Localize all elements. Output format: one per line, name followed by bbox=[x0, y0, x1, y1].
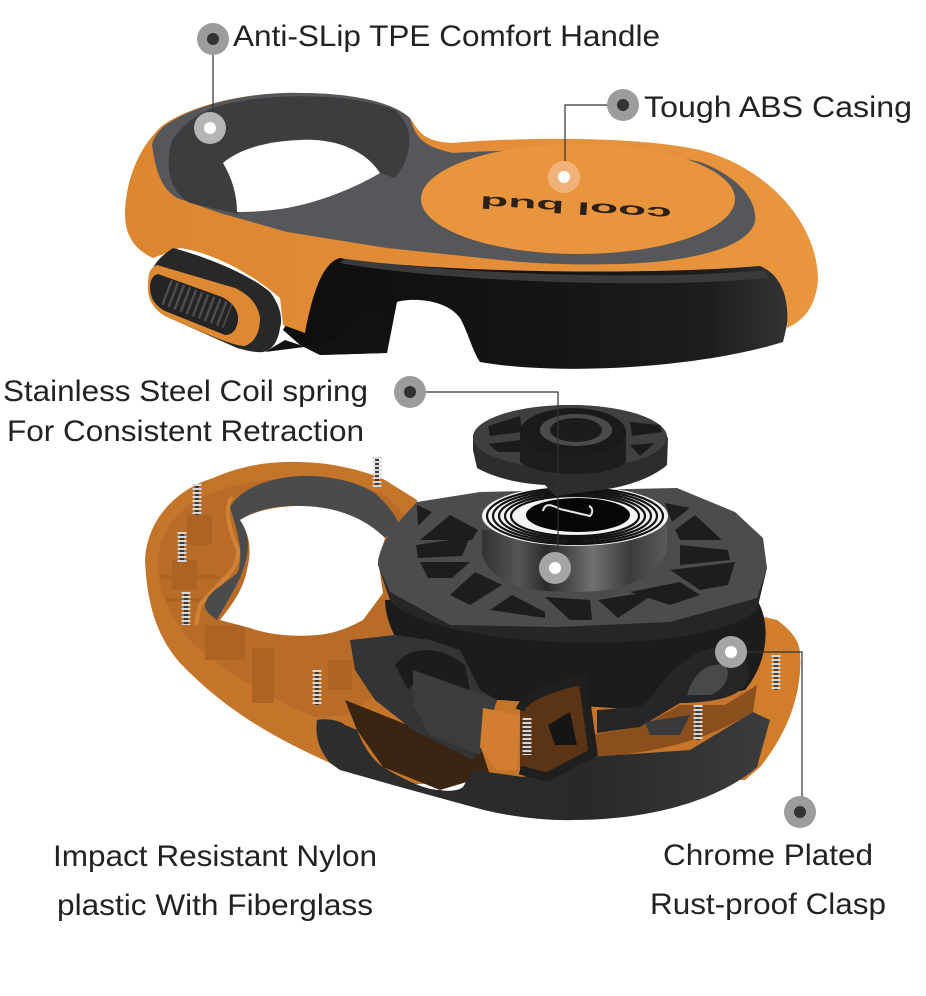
reel drum bbox=[385, 600, 766, 710]
caption: nylon shell bbox=[53, 840, 377, 922]
orange tab bbox=[480, 708, 520, 770]
caption: nylon shell: plastic With Fiberglass bbox=[57, 889, 373, 922]
caption: nylon shell: Impact Resistant Nylon bbox=[53, 840, 377, 873]
callout: comfort handle: Anti-SLip TPE Comfort Handle bbox=[233, 20, 660, 53]
inner details under casing bbox=[265, 310, 390, 355]
brand logo: cool bud bbox=[479, 192, 672, 223]
clasp and cage bbox=[350, 635, 749, 777]
upper reel disc bbox=[473, 405, 668, 496]
shell posts and ribs bbox=[160, 515, 352, 703]
bolt snap hook bbox=[597, 647, 749, 733]
callout: clasp: Rust-proof Clasp bbox=[650, 888, 886, 921]
coil spring bbox=[482, 486, 668, 546]
slide button bbox=[148, 248, 281, 352]
disc hub cylinder bbox=[520, 432, 626, 474]
callout: casing bbox=[548, 89, 912, 193]
bottom black rim bbox=[316, 712, 770, 820]
screws bbox=[182, 457, 776, 755]
callout: casing: Tough ABS Casing bbox=[644, 91, 912, 124]
grey grip inside shell bbox=[205, 476, 400, 620]
callout: clasp: Chrome Plated bbox=[663, 839, 873, 872]
handle hole bbox=[223, 140, 380, 212]
reel assembly bbox=[145, 405, 800, 820]
cage frame bbox=[520, 680, 593, 777]
orange body bbox=[125, 93, 818, 333]
grey grip and top panel bbox=[152, 93, 755, 264]
lower shell outer bbox=[145, 462, 800, 785]
disc windows bbox=[488, 416, 522, 436]
casing side wall bbox=[283, 252, 788, 369]
callout: comfort handle bbox=[194, 20, 660, 144]
shell interior bbox=[158, 479, 420, 718]
reel plate bbox=[378, 488, 767, 627]
callout: coil spring: Stainless Steel Coil spring bbox=[3, 375, 368, 408]
interior brown area bbox=[590, 685, 757, 757]
rib highlight on shell bbox=[196, 497, 238, 625]
callout: coil spring: For Consistent Retraction bbox=[7, 415, 364, 448]
callout: coil spring bbox=[3, 375, 571, 584]
orange lid disc bbox=[421, 144, 735, 254]
hole bbox=[220, 506, 385, 636]
plate windows bbox=[416, 503, 735, 620]
reel plate edge bbox=[378, 565, 767, 643]
lumpy swivel body bbox=[350, 635, 497, 760]
dark handle grip bbox=[169, 96, 409, 214]
grey lip on side wall bbox=[340, 258, 768, 283]
coil hub wall bbox=[482, 525, 667, 592]
top casing bbox=[125, 93, 818, 369]
callout: clasp bbox=[650, 636, 886, 921]
handle tube bbox=[413, 670, 497, 755]
orange inner right bbox=[735, 610, 800, 767]
spring hook bbox=[543, 505, 592, 516]
